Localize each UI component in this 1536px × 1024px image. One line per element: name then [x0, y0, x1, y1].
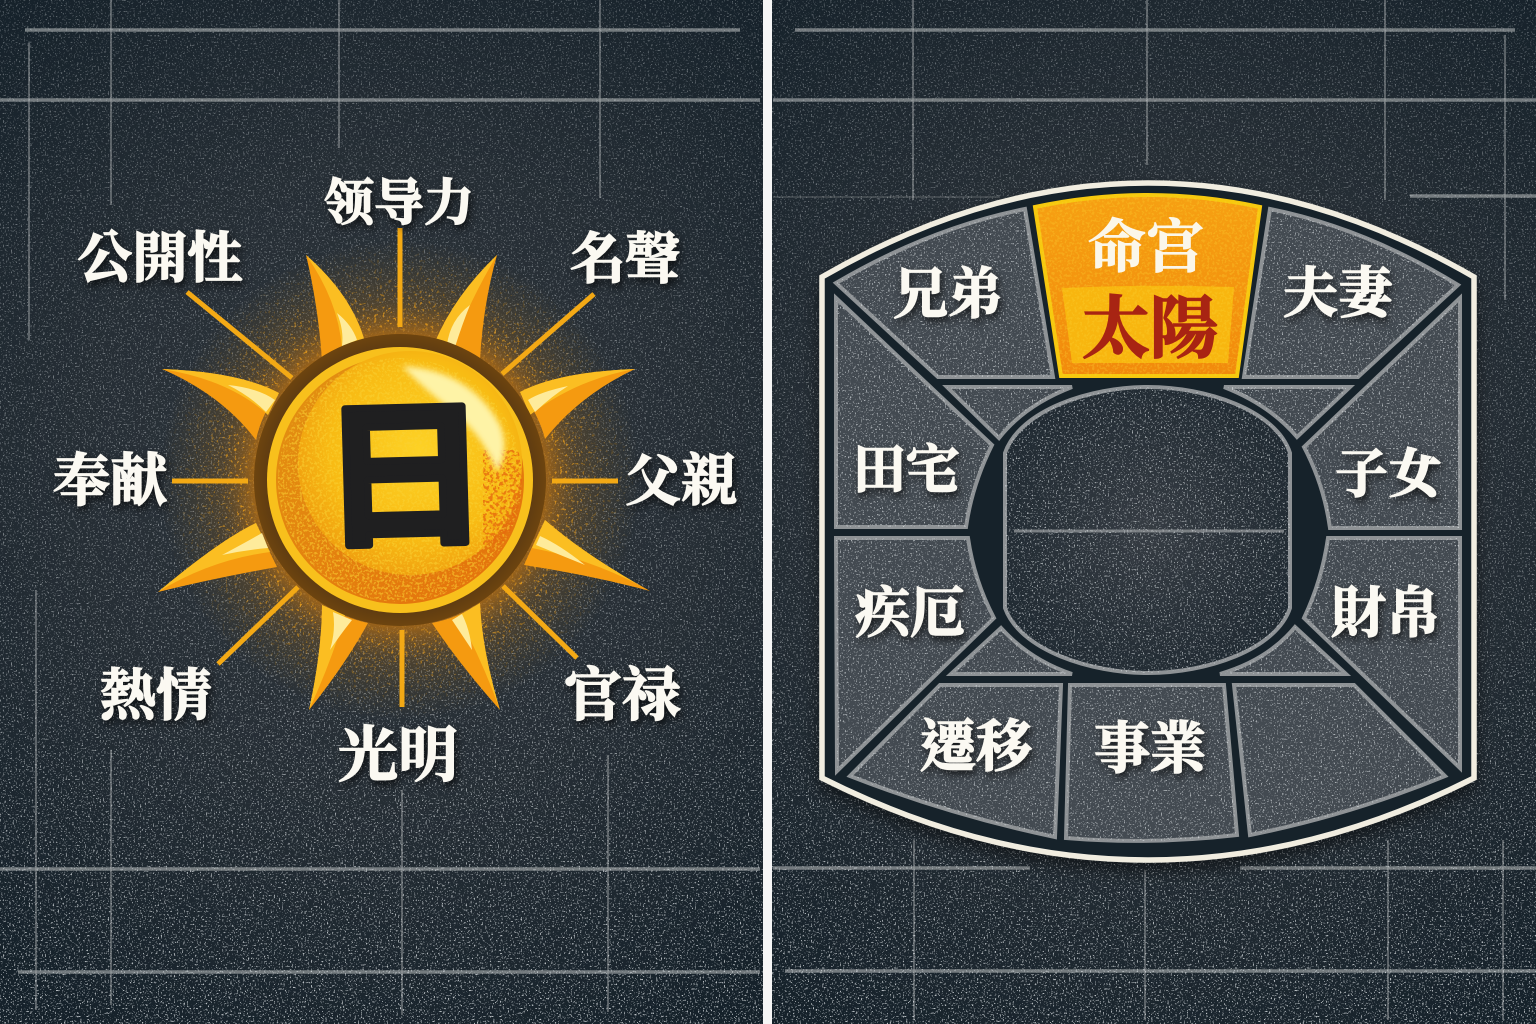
- palace names: 財帛: [1331, 583, 1441, 644]
- palace names: 兄弟: [893, 264, 1003, 325]
- sun keywords: 官禄: [564, 663, 680, 728]
- sun keywords: 熱情: [100, 666, 212, 728]
- highlighted palace: ming: 太陽: [1082, 291, 1218, 367]
- sun disc: [254, 334, 546, 626]
- highlighted palace: ming: [1030, 190, 1265, 380]
- sun keywords: 父親: [625, 451, 737, 513]
- sun rays: [158, 255, 650, 710]
- panel: sun diagram: [53, 175, 737, 789]
- sun glow: [160, 240, 640, 720]
- chart frame: [822, 183, 1474, 860]
- sun keywords: 公開性: [77, 228, 243, 289]
- sun keywords: 光明: [338, 723, 458, 789]
- panel: palace chart: [820, 180, 1480, 860]
- sun keywords: 领导力: [324, 175, 474, 231]
- palace cell texture: [836, 210, 1460, 841]
- palace names: 子女: [1335, 446, 1443, 504]
- sun keywords: 名聲: [570, 229, 680, 290]
- sun glyph: 日: [318, 347, 491, 580]
- palace names: 疾厄: [855, 583, 965, 644]
- palace cells: [836, 209, 1460, 841]
- sun keywords: 奉献: [53, 450, 170, 513]
- palace names: 事業: [1094, 719, 1213, 781]
- sun connector lines: [172, 228, 618, 707]
- palace names: 遷移: [920, 717, 1032, 779]
- divider: [763, 0, 772, 1024]
- palace names: [853, 263, 1443, 781]
- highlighted palace: ming: 命宫: [1088, 215, 1204, 280]
- panel: left background: [0, 0, 763, 1024]
- center line: [1014, 530, 1284, 532]
- palace names: 夫妻: [1283, 263, 1393, 324]
- center space: [1005, 387, 1290, 673]
- palace names: 田宅: [853, 442, 959, 500]
- sun keywords: [53, 175, 737, 789]
- panel: right background: [772, 0, 1536, 1024]
